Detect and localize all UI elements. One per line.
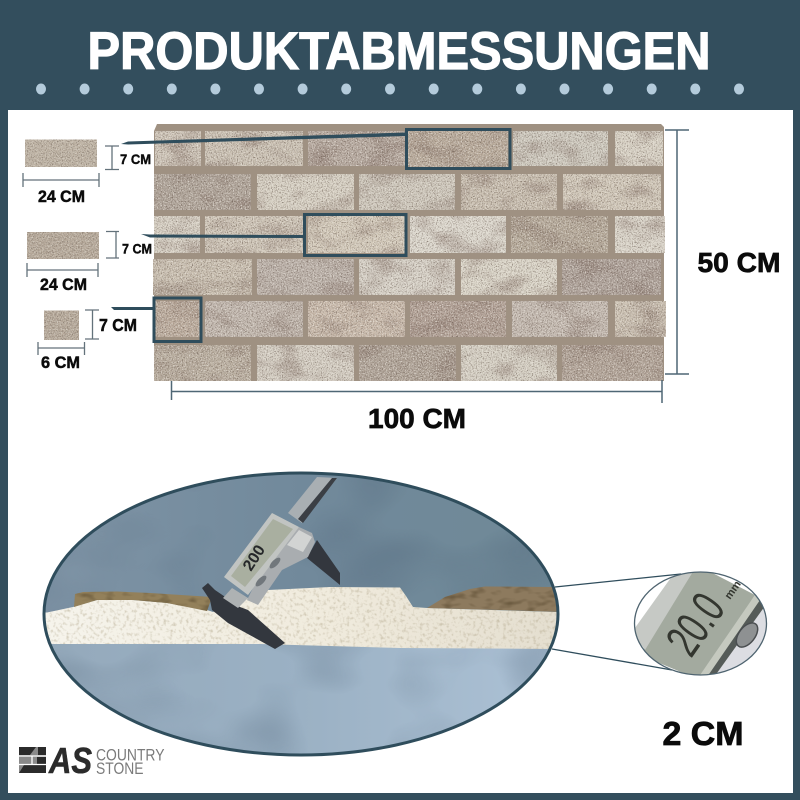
- magnified reading inset: [634, 571, 768, 676]
- highlight frame: half brick: [154, 298, 201, 342]
- foam cross-section: [40, 587, 562, 649]
- label: 100 CM: [368, 403, 466, 434]
- sample brick 2 with dimensions: [27, 232, 152, 294]
- sample brick: [25, 140, 97, 167]
- upper bezel strip: [635, 573, 692, 650]
- height dimension line: [105, 146, 119, 170]
- height label: 7 CM: [99, 315, 137, 335]
- lcd digits: 20.0: [657, 584, 736, 665]
- thickness photo oval: [40, 470, 565, 759]
- dotted divider: [36, 84, 744, 94]
- height label: 7 CM: [122, 240, 152, 256]
- lcd band: [644, 572, 755, 674]
- inset base: [672, 669, 673, 670]
- highlight frame: brick 2: [304, 214, 406, 256]
- dimension line: [665, 130, 689, 374]
- height dimension line: [106, 232, 119, 258]
- leader line: brick 2: [141, 234, 304, 238]
- width dimension line: [27, 263, 98, 277]
- caliper beam: [288, 477, 337, 523]
- logo icon: bricks: [19, 747, 46, 773]
- width label: 6 CM: [41, 353, 80, 372]
- thickness label: 2 CM: [662, 715, 744, 752]
- lcd unit: mm: [723, 579, 744, 602]
- upper jaw: [307, 540, 340, 585]
- height label: 7 CM: [120, 151, 151, 167]
- caliper body: [247, 527, 315, 605]
- sample brick: [27, 232, 99, 259]
- caliper: [202, 477, 340, 649]
- leader line: half brick: [111, 307, 153, 310]
- lcd bezel: [224, 513, 299, 595]
- slider strip: [223, 588, 248, 608]
- width dimension line: [38, 342, 84, 355]
- panel height dimension: [665, 130, 780, 374]
- sample brick 1 with dimensions: [23, 140, 151, 206]
- buttons: [268, 556, 282, 570]
- ribbed grip: [287, 530, 312, 552]
- leader line: brick 1: [121, 132, 406, 144]
- title: PRODUKTABMESSUNGEN: [88, 22, 710, 81]
- logo STONE: STONE: [96, 759, 144, 778]
- height dimension line: [85, 310, 99, 339]
- lower bezel: [700, 596, 759, 674]
- highlight frame: brick 1: [406, 130, 510, 168]
- button: [736, 622, 758, 648]
- lower jaw: [202, 583, 285, 649]
- lcd screen: [231, 519, 293, 587]
- logo AS: AS: [48, 740, 92, 781]
- inset outline: [634, 572, 766, 675]
- oval outline: [44, 473, 558, 755]
- sample half brick with dimensions: [38, 310, 137, 372]
- label: 50 CM: [698, 247, 780, 278]
- dimension line: [172, 380, 662, 403]
- logo: [19, 740, 164, 781]
- stone layer left: [74, 592, 212, 611]
- width label: 24 CM: [40, 276, 87, 294]
- sample brick: [44, 310, 79, 340]
- wall background above: [46, 474, 556, 612]
- brick wall panel: [153, 124, 666, 381]
- logo COUNTRY: COUNTRY: [96, 746, 164, 764]
- lcd reading: 200: [240, 542, 269, 574]
- panel width dimension: [172, 380, 662, 434]
- table surface below: [40, 644, 565, 759]
- mortar backing: [154, 124, 664, 381]
- width dimension line: [23, 173, 99, 187]
- width label: 24 CM: [38, 188, 85, 206]
- callout leader lines: [552, 574, 681, 670]
- bricks: [153, 131, 666, 381]
- stone layer right: [427, 586, 560, 612]
